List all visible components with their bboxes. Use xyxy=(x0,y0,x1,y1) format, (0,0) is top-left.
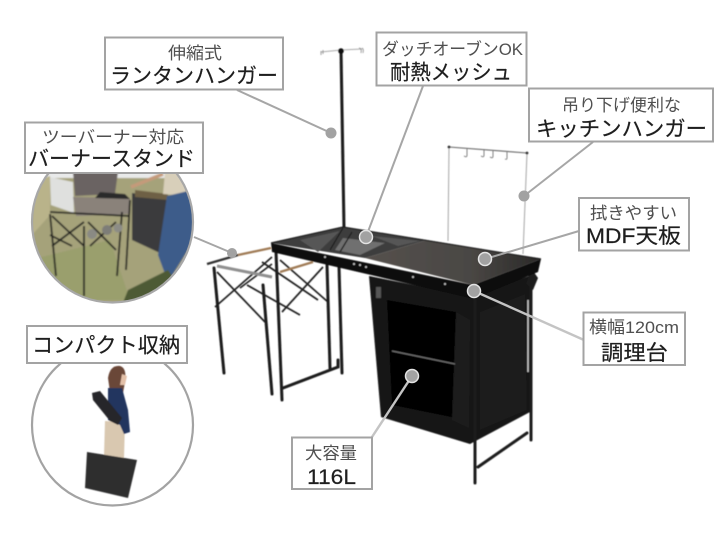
leader lines xyxy=(194,86,593,437)
icon: person carrying folded table xyxy=(85,366,137,498)
label: compact storage: コンパクト収納 xyxy=(32,334,180,358)
kitchen hanger frame xyxy=(448,146,528,254)
label: MDF top xyxy=(579,198,689,250)
label: 116L capacity: 116L xyxy=(307,466,356,489)
label: kitchen hanger: キッチンハンガー xyxy=(536,118,707,141)
label: lantern hanger xyxy=(105,38,283,90)
label: 120cm cooking table: 横幅120cm xyxy=(589,318,679,337)
front left table leg xyxy=(276,252,282,400)
marker dots xyxy=(227,128,530,382)
lantern hanger pole xyxy=(321,48,363,228)
side burner stand xyxy=(207,248,342,394)
label: MDF top: MDF天板 xyxy=(586,225,681,248)
table top xyxy=(271,227,541,298)
label: lantern hanger: 伸縮式 xyxy=(168,44,222,63)
label: burner stand: バーナースタンド xyxy=(28,148,195,171)
label: burner stand xyxy=(25,122,203,173)
cabinet legs xyxy=(475,268,538,483)
label: 120cm cooking table xyxy=(584,312,685,365)
photo circle: compact storage xyxy=(32,344,193,506)
label: lantern hanger: ランタンハンガー xyxy=(110,65,278,88)
label: burner stand: ツーバーナー対応 xyxy=(42,128,184,147)
label: heat resistant mesh xyxy=(376,32,526,86)
label: kitchen hanger: 吊り下げ便利な xyxy=(562,96,681,115)
label: 120cm cooking table: 調理台 xyxy=(601,342,668,365)
product: kitchen table xyxy=(207,48,541,483)
label: 116L capacity: 大容量 xyxy=(305,444,357,463)
label: kitchen hanger xyxy=(529,88,713,142)
label: 116L capacity xyxy=(292,438,372,489)
photo circle: burner stand in use xyxy=(30,174,194,304)
storage cabinet xyxy=(369,275,532,444)
label: heat resistant mesh: 耐熱メッシュ xyxy=(390,62,512,84)
label: heat resistant mesh: ダッチオーブンOK xyxy=(382,39,524,59)
label: MDF top: 拭きやすい xyxy=(590,204,677,223)
label: compact storage xyxy=(27,326,187,363)
